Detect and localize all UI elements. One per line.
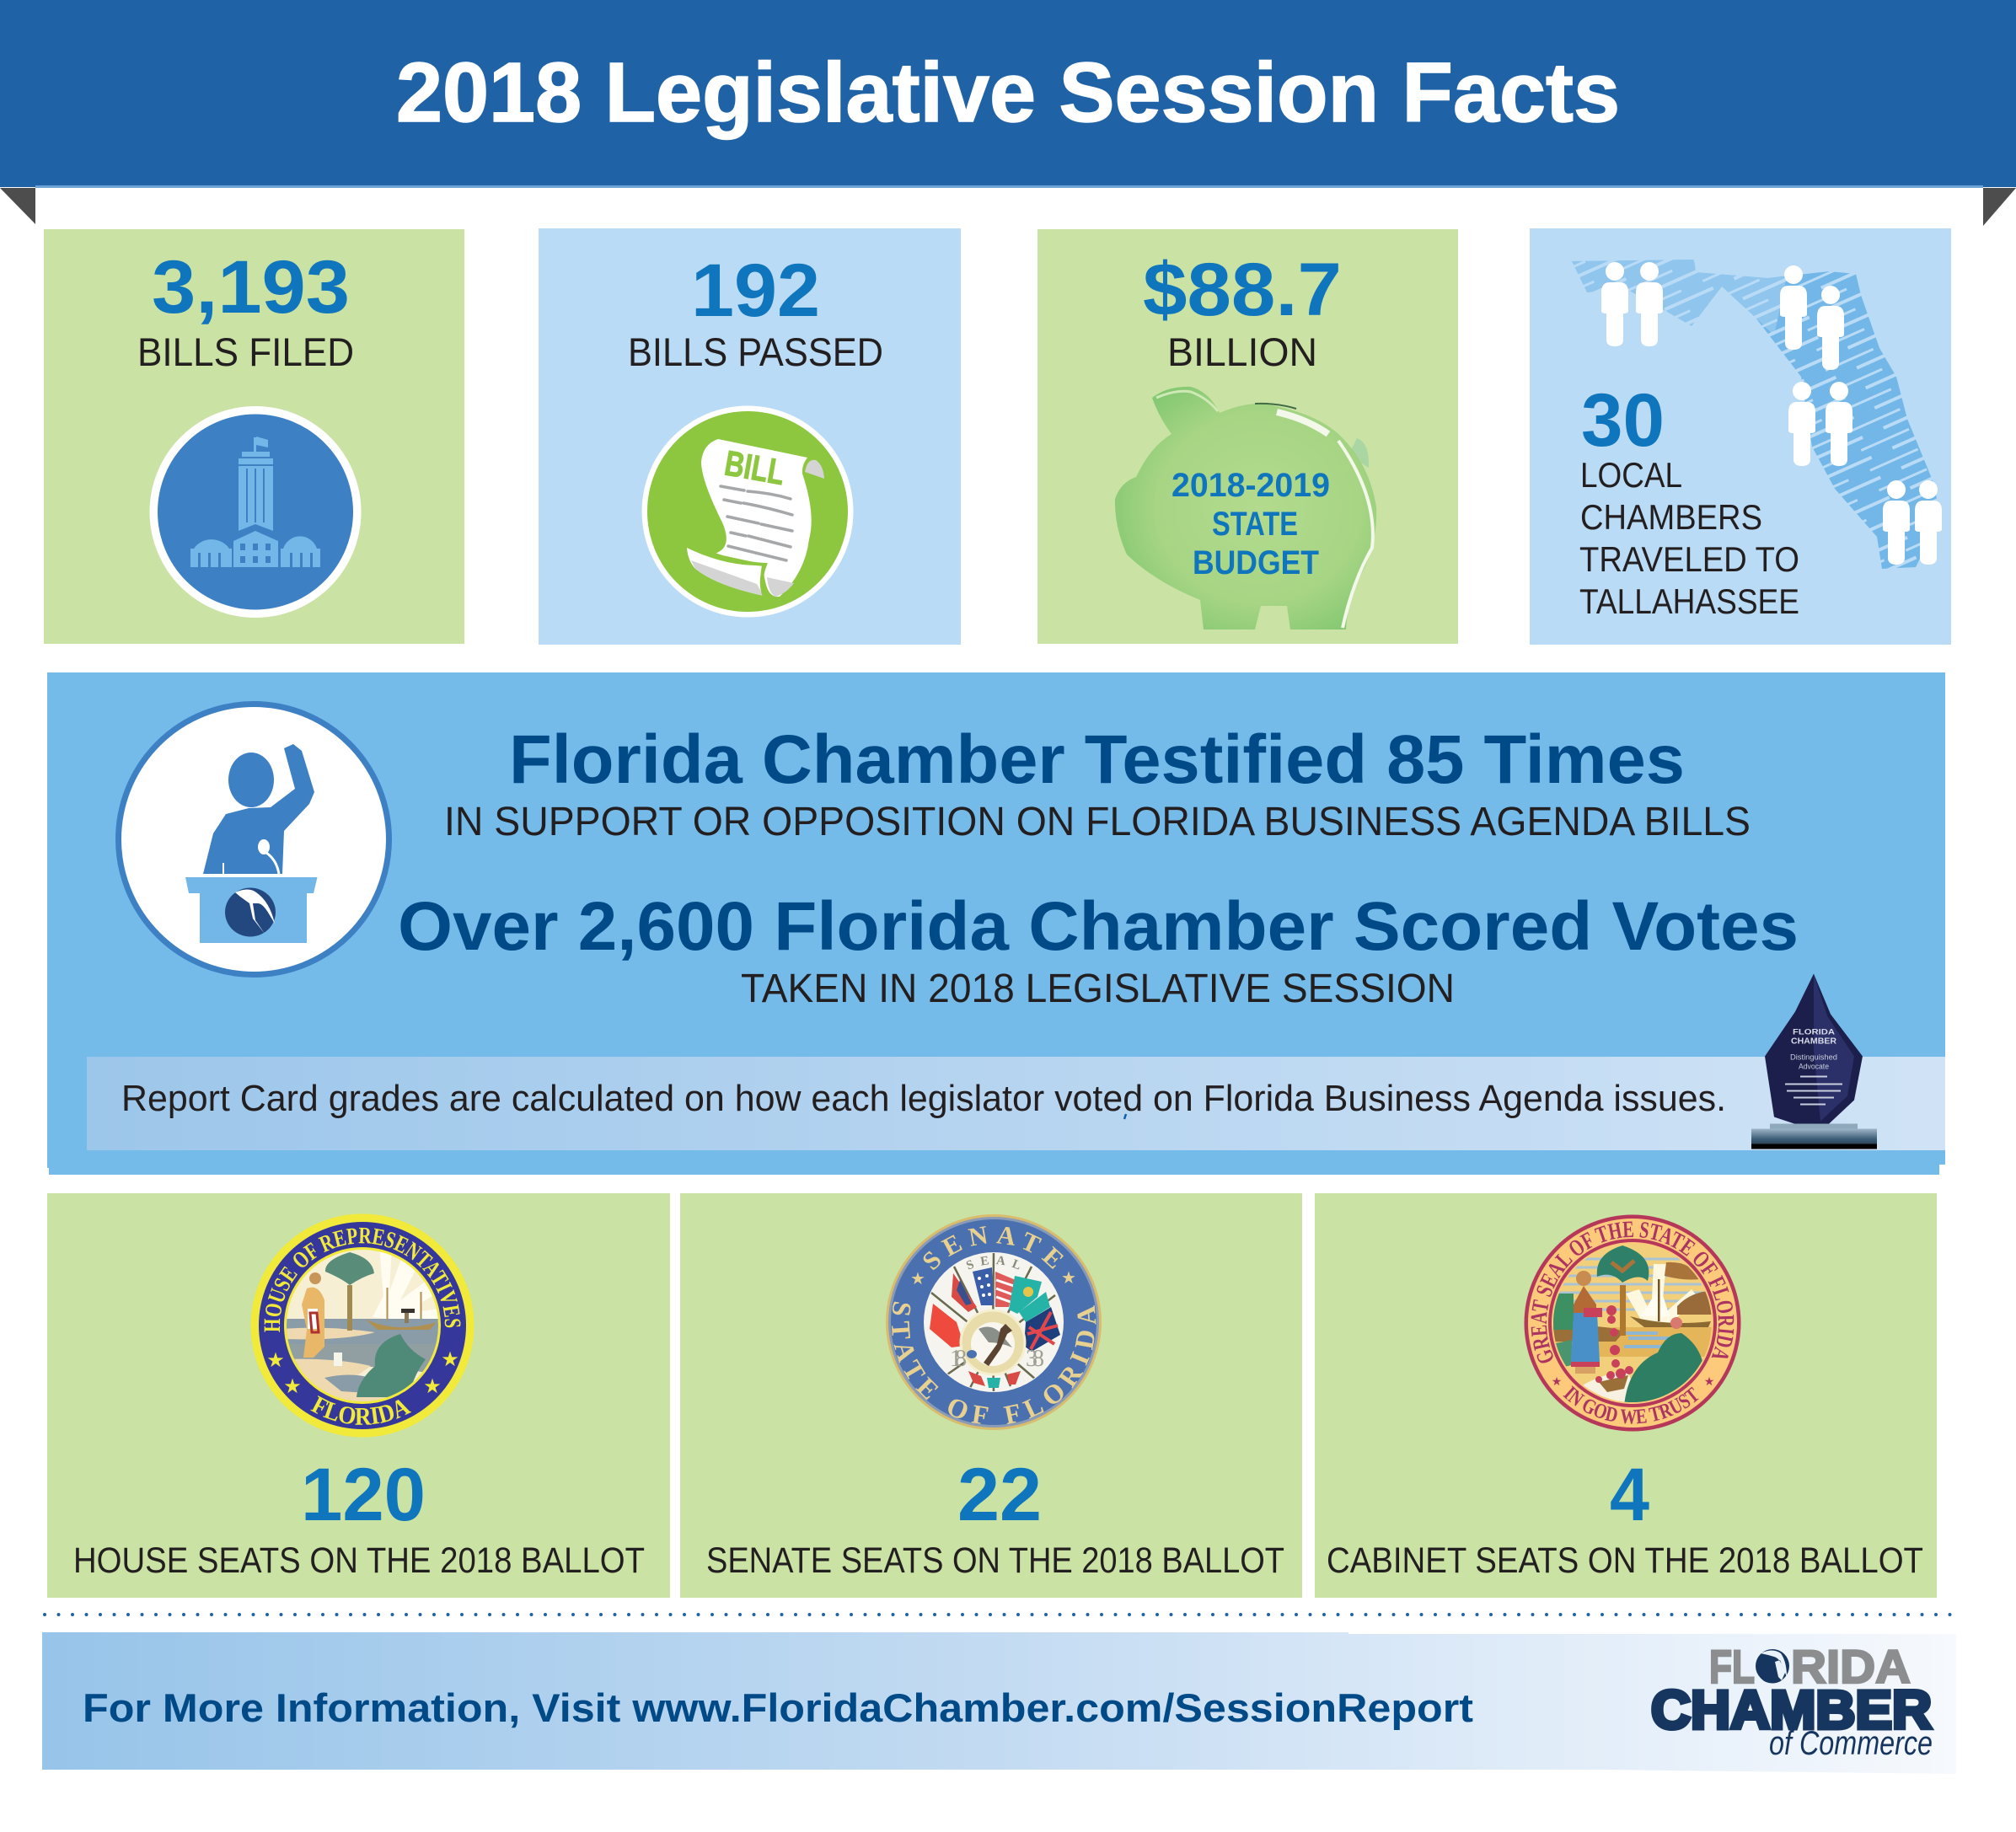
footer link text: For More Information, Visit www.FloridaChamber.com/SessionReport: [83, 1685, 1473, 1730]
icon: piggy bank: [1115, 387, 1376, 629]
icon: award trophy: Distinguished: [1790, 1053, 1837, 1062]
label: local chambers traveled: CHAMBERS: [1580, 497, 1762, 537]
panel: bills passed: [539, 228, 961, 645]
seal: house of representatives: ★: [283, 1375, 302, 1398]
seal: great seal of florida: IN GOD WE TRUST: [1563, 1385, 1699, 1424]
seal: great seal of florida: [1524, 1215, 1741, 1431]
banner fold left: [0, 188, 35, 224]
label: bills filed: BILLS FILED: [137, 329, 354, 374]
label: local chambers traveled: LOCAL: [1580, 455, 1682, 495]
budget label: [1172, 467, 1330, 581]
title: 2018 Legislative Session Facts: [396, 46, 1620, 140]
map: florida: [1572, 260, 1941, 569]
label: local chambers traveled: TALLAHASSEE: [1579, 581, 1799, 621]
panel: testimony and votes: [47, 672, 1945, 1175]
stat: 30: 30: [1581, 378, 1665, 462]
icon: award trophy: FLORIDA: [1793, 1028, 1836, 1037]
stat: $88.7: $88.7: [1143, 247, 1342, 331]
seal: great seal of florida: ★: [1704, 1374, 1714, 1388]
seal: house of representatives: ★: [266, 1349, 285, 1372]
label: local chambers traveled: [1579, 455, 1799, 621]
logo: florida chamber: FL: [1709, 1640, 1755, 1693]
panel: house seats: [47, 1193, 670, 1598]
label: cabinet seats: CABINET SEATS ON THE 2018 BALLOT: [1327, 1540, 1923, 1581]
banner fold right: [1983, 188, 2016, 226]
seal: senate: 18: [950, 1346, 967, 1372]
icon: bill scroll: BILL: [721, 443, 788, 492]
seal: senate: ★: [1061, 1269, 1076, 1288]
seal: house of representatives: FLORIDA: [310, 1395, 411, 1425]
stat: 3,193: 3,193: [152, 244, 350, 329]
seal: senate: STATE OF FLORIDA: [892, 1301, 1096, 1424]
report card strip: [87, 1057, 1945, 1150]
stat: 4: 4: [1610, 1452, 1649, 1536]
icon: award trophy: [1751, 974, 1877, 1149]
icon: award trophy: CHAMBER: [1791, 1037, 1837, 1047]
seal: house of representatives: [251, 1213, 474, 1438]
icon: award trophy: Advocate: [1799, 1062, 1829, 1070]
stat: 120: 120: [301, 1452, 426, 1536]
icon: capitol building: [150, 406, 361, 618]
label: local chambers traveled: TRAVELED TO: [1579, 539, 1799, 579]
budget label: STATE: [1212, 506, 1298, 543]
label: bills passed: BILLS PASSED: [628, 329, 883, 374]
seal: senate: 38: [1026, 1346, 1044, 1372]
report card text: Report Card grades are calculated on how each legislator voted on Florida Business Agenda issues.: [121, 1078, 1726, 1119]
heading: testified 85 times: Florida Chamber Testified 85 Times: [509, 721, 1685, 798]
seal: house of representatives: ★: [423, 1375, 442, 1398]
logo: florida chamber: RIDA: [1791, 1640, 1911, 1693]
stat: 192: 192: [691, 248, 820, 332]
seal: great seal of florida: ★: [1552, 1374, 1562, 1388]
logo: florida chamber: O: [1756, 1640, 1789, 1693]
panel: bills filed: [44, 229, 464, 644]
panel: local chambers: [1530, 228, 1951, 645]
seal: house of representatives: HOUSE OF REPRESENTATIVES: [265, 1227, 460, 1332]
budget label: BUDGET: [1193, 544, 1319, 581]
seal: senate: SEAL: [966, 1256, 1020, 1269]
icon: speaker at podium: [118, 704, 389, 974]
panel: senate seats: [680, 1193, 1302, 1598]
label: senate seats: SENATE SEATS ON THE 2018 BALLOT: [706, 1540, 1284, 1581]
subheading: testimony: IN SUPPORT OR OPPOSITION ON FLORIDA BUSINESS AGENDA BILLS: [444, 800, 1751, 844]
logo: florida chamber: of Commerce: [1769, 1725, 1933, 1762]
seal: senate: [886, 1214, 1102, 1430]
seal: house of representatives: ★: [441, 1348, 459, 1371]
label: house seats: HOUSE SEATS ON THE 2018 BALLOT: [73, 1540, 645, 1581]
logo: florida chamber: CHAMBER: [1651, 1679, 1932, 1740]
panel: cabinet seats: [1315, 1193, 1937, 1598]
panel: state budget: [1037, 229, 1458, 644]
subheading: votes: TAKEN IN 2018 LEGISLATIVE SESSION: [741, 967, 1455, 1011]
heading: scored votes: Over 2,600 Florida Chamber Scored Votes: [398, 888, 1799, 965]
seal: great seal of florida: GREAT SEAL OF THE STATE OF FLORIDA: [1531, 1222, 1735, 1363]
seal: senate: SENATE: [924, 1226, 1064, 1271]
header banner: [0, 0, 2016, 188]
budget label: 2018-2019: [1172, 467, 1330, 504]
footer panel: [42, 1632, 1956, 1774]
seal: senate: ★: [910, 1270, 925, 1288]
icon: bill scroll: [642, 406, 853, 617]
stat: 22: 22: [957, 1452, 1042, 1536]
logo: florida chamber: [1651, 1640, 1933, 1762]
icon: people: [1601, 262, 1942, 565]
label: billion: BILLION: [1167, 329, 1317, 374]
